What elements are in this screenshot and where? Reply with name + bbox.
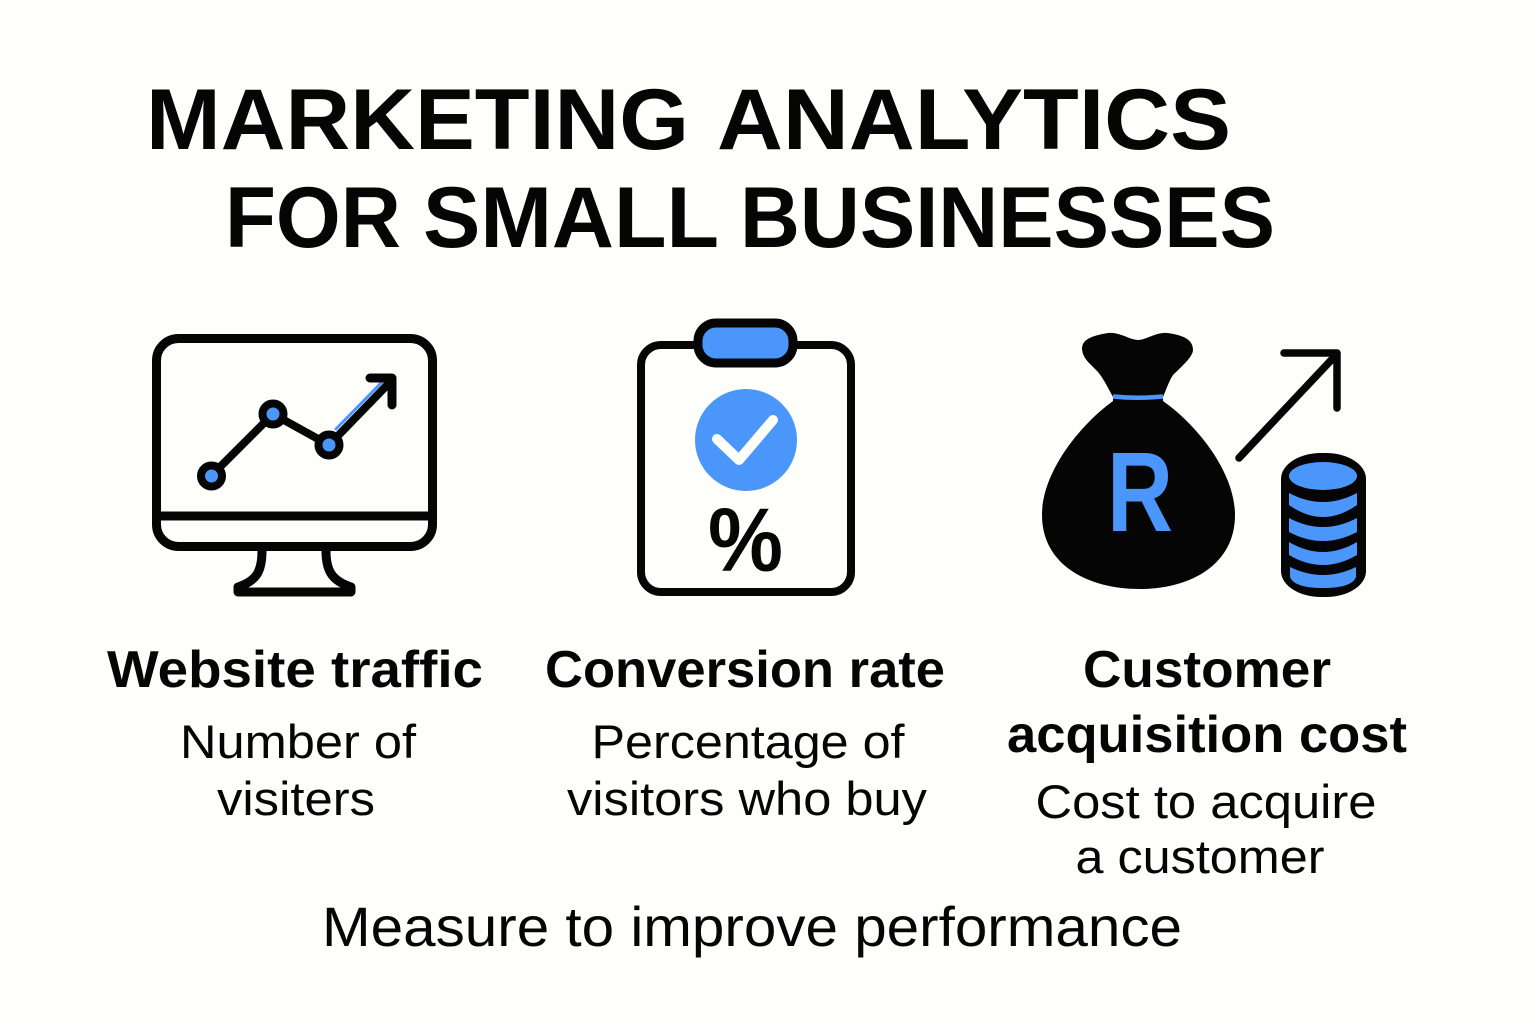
money bag tie [1113,396,1163,398]
title: BUSINESSES [740,170,1275,266]
footer tagline: Measure to improve performance [322,895,1182,958]
growth arrow [1239,353,1337,458]
column: conversion rate [545,641,945,825]
column: conversion rate: Percentage of [592,715,905,768]
coin stack [1281,453,1366,597]
column: customer acquisition cost: Cost to acquire [1036,775,1376,828]
title: MARKETING [146,72,689,168]
icon: clipboard with check and percent: % [708,491,783,591]
title [146,72,1275,266]
column: website traffic: visiters [217,772,375,825]
title: FOR [225,170,401,266]
column: conversion rate: Conversion rate [545,641,945,699]
currency letter: R [1107,429,1173,555]
column: customer acquisition cost: acquisition cost [1007,706,1407,764]
column: website traffic [107,641,483,825]
column: conversion rate: visitors who buy [567,772,928,825]
column: customer acquisition cost: a customer [1076,830,1324,883]
icon: money bag with arrow and coin stack [1042,333,1366,597]
title: SMALL [423,170,719,266]
icon: clipboard with check and percent [641,323,851,592]
icon: monitor with line chart [156,338,432,592]
column: website traffic: Website traffic [107,641,483,699]
title: ANALYTICS [717,72,1231,168]
column: website traffic: Number of [180,715,417,768]
column: customer acquisition cost: Customer [1083,641,1331,699]
column: customer acquisition cost [1007,641,1407,883]
